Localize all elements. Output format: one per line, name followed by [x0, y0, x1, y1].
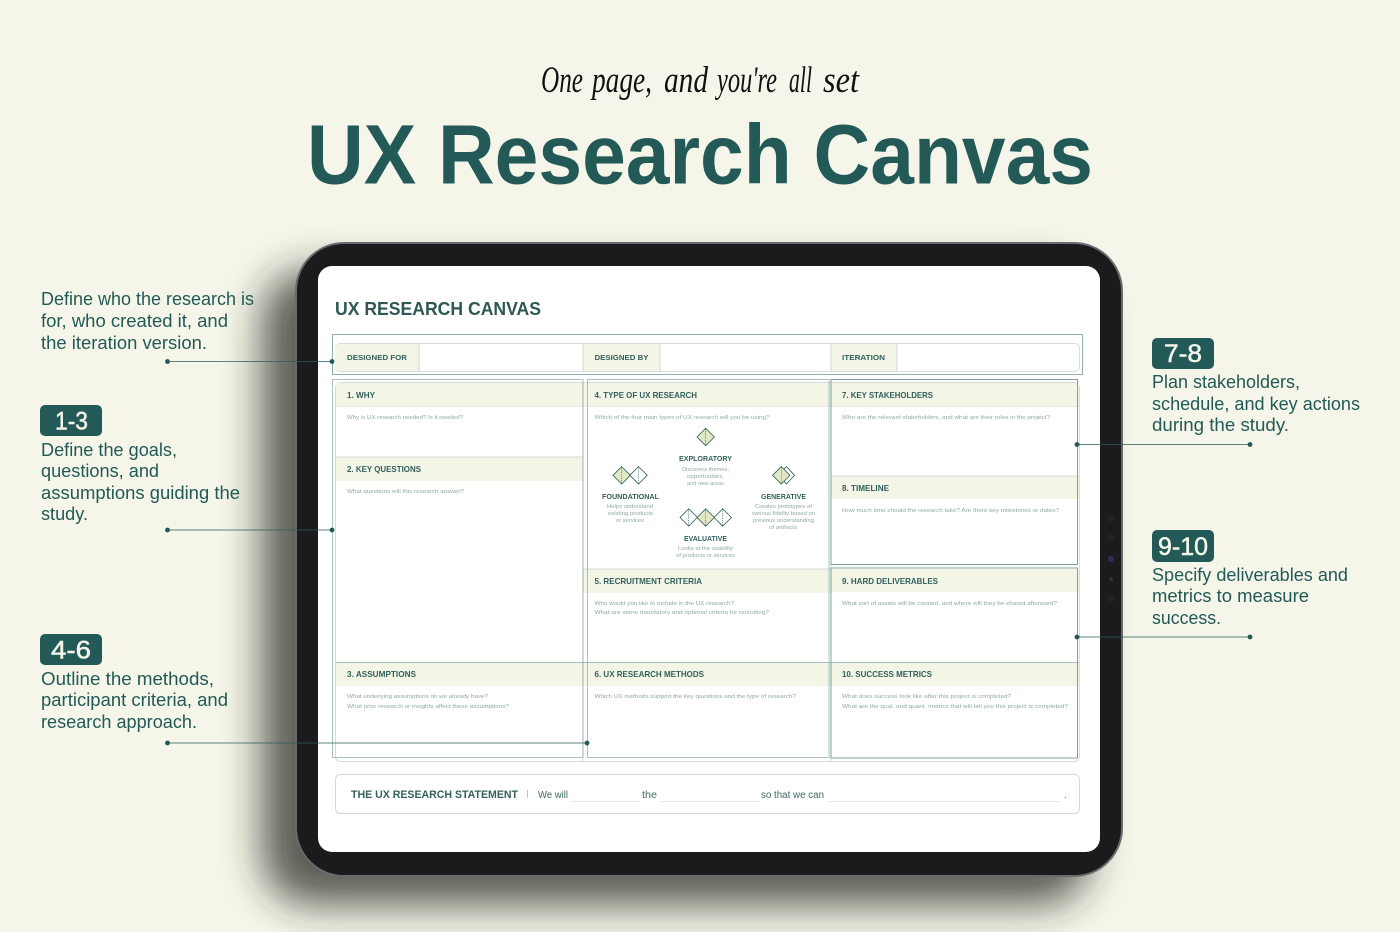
- callout: 4-6: 4-6: [51, 636, 91, 664]
- arrow: 7-8 connector: [1075, 442, 1252, 447]
- exploratory text: opportunities,: [687, 474, 724, 480]
- subtitle: set: [823, 60, 860, 101]
- generative text: various fidelity based on: [752, 511, 815, 517]
- panel: research statement: the: [642, 790, 657, 801]
- panel: 2 key questions: [336, 457, 583, 495]
- foundational text: existing products: [608, 511, 653, 517]
- callout: 7-8: [1075, 338, 1360, 447]
- title: UX Research Canvas: [307, 108, 1093, 202]
- foundational text: [602, 492, 660, 524]
- exploratory text: EXPLORATORY: [679, 454, 732, 463]
- panel: 4 type of ux research: 4. TYPE OF UX RESEARCH: [594, 390, 697, 400]
- icon: generative diamonds: [773, 467, 794, 484]
- designed by label: [583, 344, 660, 371]
- panel: 3 assumptions: What underlying assumptions do we already have?: [347, 694, 489, 700]
- panel: research statement: .: [1064, 790, 1067, 801]
- panel: canvas grid: [336, 382, 1080, 762]
- callout: 4-6: participant criteria, and: [41, 689, 228, 710]
- panel: 4 type of ux research: Which of the four main types of UX research will you be using?: [594, 415, 770, 421]
- evaluative text: [676, 534, 735, 559]
- icon: evaluative diamonds: [680, 509, 731, 526]
- callout: 1-3: [40, 405, 334, 532]
- callout: header row: for, who created it, and: [41, 310, 228, 331]
- panel: 7 key stakeholders: Who are the relevant stakeholders, and what are their roles in the project?: [842, 415, 1051, 421]
- panel: research statement: [336, 774, 1080, 814]
- screen: [318, 266, 1100, 852]
- iteration label: ITERATION: [842, 353, 885, 362]
- generative text: Creates prototypes of: [755, 504, 812, 510]
- subtitle: One: [541, 60, 583, 101]
- panel: header row: [335, 344, 1080, 372]
- callout: 9-10: 9-10: [1158, 533, 1208, 561]
- callout: 9-10: metrics to measure: [1152, 585, 1309, 606]
- callout: 1-3: 1-3: [55, 408, 88, 436]
- generative text: [752, 492, 815, 531]
- panel: 5 recruitment criteria: [583, 569, 831, 616]
- panel: 9 hard deliverables: 9. HARD DELIVERABLES: [842, 576, 938, 586]
- callout: header row: the iteration version.: [41, 332, 207, 353]
- panel: 3 assumptions: What prior research or insights affect these assumptions?: [347, 704, 510, 710]
- panel: 1 why: [336, 383, 583, 421]
- callout: 7-8: schedule, and key actions: [1152, 393, 1360, 414]
- icon: foundational diamonds: [613, 467, 647, 484]
- callout: 9-10: [1075, 530, 1348, 639]
- foundational text: FOUNDATIONAL: [602, 492, 660, 501]
- exploratory text: [679, 454, 732, 487]
- callout: 4-6: research approach.: [41, 711, 197, 732]
- callout: header row: [41, 288, 334, 364]
- subtitle: you're: [714, 60, 777, 101]
- panel: 8 timeline: [831, 476, 1079, 514]
- callout: header row: Define who the research is: [41, 288, 254, 309]
- exploratory text: Discovers themes,: [682, 467, 729, 473]
- callout: 7-8: during the study.: [1152, 414, 1289, 435]
- designed by label: DESIGNED BY: [594, 353, 649, 362]
- callout: 1-3: study.: [41, 503, 88, 524]
- callout: 9-10: success.: [1152, 607, 1221, 628]
- designed for label: DESIGNED FOR: [347, 353, 408, 362]
- foundational text: or services: [616, 518, 644, 524]
- panel: 5 recruitment criteria: 5. RECRUITMENT CRITERIA: [594, 576, 702, 586]
- panel: 7 key stakeholders: 7. KEY STAKEHOLDERS: [842, 390, 933, 400]
- panel: 9 hard deliverables: [831, 569, 1079, 607]
- panel: 3 assumptions: [336, 662, 583, 710]
- callout: 4-6: [40, 634, 589, 745]
- foundational text: Helps understand: [607, 504, 653, 510]
- callout: 1-3: questions, and: [41, 460, 159, 481]
- panel: 10 success metrics: What does success look like after this project is completed?: [842, 694, 1012, 700]
- camera and sensors: [1107, 514, 1115, 602]
- evaluative text: EVALUATIVE: [684, 534, 727, 543]
- tablet shadow: [262, 270, 1090, 905]
- callout: 9-10: Specify deliverables and: [1152, 564, 1348, 585]
- panel: 8 timeline: How much time should the research take? Are there key milestones or dates?: [842, 508, 1060, 514]
- callout: 7-8: Plan stakeholders,: [1152, 371, 1300, 392]
- panel: 10 success metrics: 10. SUCCESS METRICS: [842, 669, 932, 679]
- callout: 4-6: Outline the methods,: [41, 668, 214, 689]
- panel: research statement: so that we can: [761, 790, 824, 801]
- subtitle: and: [664, 60, 708, 101]
- canvas heading: UX RESEARCH CANVAS: [335, 298, 541, 319]
- panel: 10 success metrics: What are the qual. and quant. metrics that will tell you this project is completed?: [842, 704, 1069, 710]
- evaluative text: Looks at the usability: [678, 546, 733, 552]
- panel: 4 type of ux research: [583, 383, 831, 559]
- arrow: header connector: [165, 359, 334, 364]
- panel: 8 timeline: 8. TIMELINE: [842, 483, 889, 493]
- iteration label: [831, 344, 897, 371]
- arrow: 4-6 connector: [165, 741, 589, 745]
- panel: 10 success metrics: [831, 662, 1079, 710]
- subtitle: page,: [590, 60, 652, 101]
- generative text: GENERATIVE: [761, 492, 806, 501]
- panel: 7 key stakeholders: [831, 383, 1079, 421]
- highlight frames: [332, 334, 1082, 758]
- panel: 9 hard deliverables: What sort of assets will be created, and where will they be shared afterward?: [842, 601, 1058, 607]
- panel: 1 why: Why is UX research needed? Is it needed?: [347, 415, 464, 421]
- panel: 6 ux research methods: 6. UX RESEARCH METHODS: [594, 669, 704, 679]
- generative text: of artifacts: [769, 525, 797, 531]
- subtitle: all: [789, 60, 812, 101]
- subtitle: [541, 60, 860, 101]
- panel: 3 assumptions: 3. ASSUMPTIONS: [347, 669, 416, 679]
- panel: 2 key questions: 2. KEY QUESTIONS: [347, 464, 421, 474]
- panel: 5 recruitment criteria: Who would you like to include in the UX research?: [594, 601, 735, 607]
- panel: research statement: THE UX RESEARCH STATEMENT: [351, 789, 518, 801]
- panel: 6 ux research methods: Which UX methods support the key questions and the type of research?: [594, 694, 797, 700]
- icon: exploratory diamond: [697, 428, 714, 446]
- panel: 5 recruitment criteria: What are some mandatory and optional criteria for recruiting?: [594, 610, 770, 616]
- designed for label: [335, 344, 419, 371]
- panel: research statement: We will: [538, 790, 568, 801]
- arrow: 1-3 connector: [165, 528, 334, 532]
- callout: 1-3: Define the goals,: [41, 439, 177, 460]
- panel: 1 why: 1. WHY: [347, 390, 375, 400]
- arrow: 9-10 connector: [1075, 635, 1252, 639]
- callout: 1-3: assumptions guiding the: [41, 482, 240, 503]
- tablet device: [296, 243, 1122, 876]
- generative text: previous understanding: [753, 518, 814, 524]
- evaluative text: of products or services: [676, 553, 735, 559]
- callout: 7-8: 7-8: [1164, 340, 1202, 368]
- panel: 6 ux research methods: [583, 662, 831, 700]
- exploratory text: and new areas: [687, 481, 724, 487]
- panel: 2 key questions: What questions will this research answer?: [347, 489, 465, 495]
